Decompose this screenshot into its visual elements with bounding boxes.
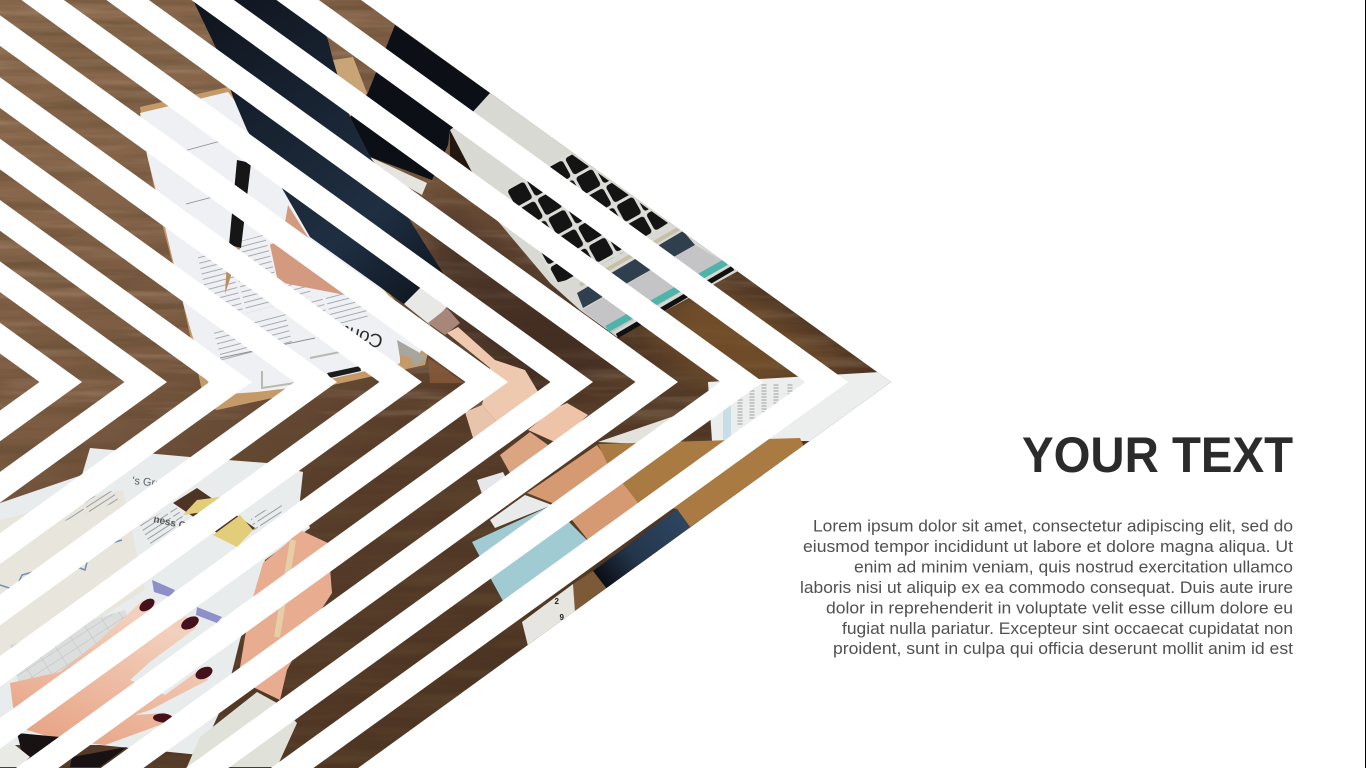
title: YOUR TEXT [1022, 427, 1293, 483]
right edge line [1365, 0, 1366, 768]
top clipboard with contract paper: Conti [337, 320, 385, 351]
top clipboard with contract paper [140, 87, 465, 410]
body paragraph: eiusmod tempor incididunt ut labore et dolore magna aliqua. Ut [803, 538, 1293, 556]
body paragraph: laboris nisi ut aliquip ex ea commodo consequat. Duis aute irure [800, 579, 1293, 597]
body paragraph: proident, sunt in culpa qui officia deserunt mollit anim id est [833, 640, 1293, 658]
man in navy suit: sleeves, cuffs and hand [193, 0, 640, 540]
paperwork and charts lower left: ness Cor [152, 514, 197, 534]
body paragraph: dolor in reprehenderit in voluptate velit esse cillum dolore eu [826, 600, 1293, 618]
desk items lower right: folder, note, papers [472, 372, 895, 646]
white chevron stripes [0, 0, 848, 768]
body paragraph: fugiat nulla pariatur. Excepteur sint occaecat cupidatat non [842, 620, 1293, 638]
laptop with keyboard [450, 93, 740, 337]
wooden desk background [0, 0, 900, 768]
body paragraph [800, 518, 1293, 658]
body paragraph: enim ad minim veniam, quis nostrud exercitation ullamco [854, 558, 1293, 576]
paperwork and charts lower left: 's Growt [132, 475, 173, 491]
desk items lower right: folder, note, papers: 2 [554, 597, 560, 606]
body paragraph: Lorem ipsum dolor sit amet, consectetur adipiscing elit, sed do [813, 518, 1293, 536]
desk items lower right: folder, note, papers: 9 [560, 613, 564, 622]
paperwork and charts lower left [0, 448, 310, 755]
photo panel: chevron-clipped desk photo [0, 0, 900, 768]
woman's hands with dark nail polish and gold pen [0, 530, 332, 767]
